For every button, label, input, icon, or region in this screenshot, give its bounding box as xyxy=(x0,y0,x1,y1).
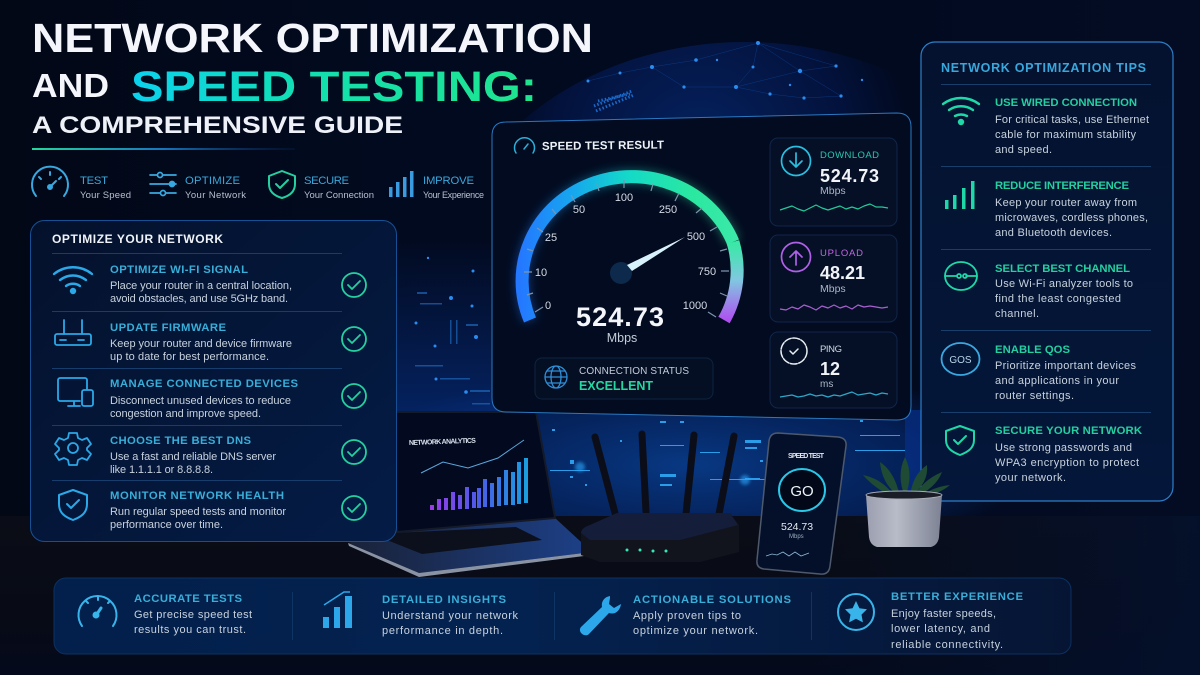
item: firmware xyxy=(55,320,366,363)
icon: gauge xyxy=(32,167,68,196)
icon: wrench xyxy=(580,596,621,635)
check xyxy=(342,496,366,520)
phone go text: GO xyxy=(790,483,814,500)
text: ACTIONABLE SOLUTIONS xyxy=(633,594,791,606)
text: wi-fi signal xyxy=(110,264,292,305)
text: Prioritize important devices xyxy=(995,360,1136,372)
ping figures: 12 xyxy=(820,359,840,379)
router antennas xyxy=(595,434,734,514)
gauge scale labels: 250 xyxy=(659,204,677,216)
bottom benefits strip xyxy=(54,578,1071,654)
phone heading: SPEED TEST xyxy=(788,453,825,460)
text: wi-fi signal: avoid obstacles, and use 5GHz band. xyxy=(110,293,288,305)
text xyxy=(134,593,252,636)
text: DETAILED INSIGHTS xyxy=(382,594,506,606)
panel heading xyxy=(514,138,664,153)
phone speed value: 524.73 xyxy=(781,521,813,533)
label: test: Your Speed xyxy=(80,190,131,201)
text: dns: like 1.1.1.1 or 8.8.8.8. xyxy=(110,464,213,476)
item: connected devices xyxy=(58,378,366,420)
text: and applications in your xyxy=(995,375,1119,387)
label: improve xyxy=(423,175,484,200)
text: network health: performance over time. xyxy=(110,519,223,531)
gauge scale labels: 0 xyxy=(545,300,551,312)
text: performance in depth. xyxy=(382,625,503,637)
text: and Bluetooth devices. xyxy=(995,227,1112,239)
subtitle: A COMPREHENSIVE GUIDE xyxy=(32,112,403,139)
label: secure: Your Connection xyxy=(304,190,374,201)
tip: qos xyxy=(942,343,1136,402)
text: dns: CHOOSE THE BEST DNS xyxy=(110,435,251,447)
label: optimize: OPTIMIZE xyxy=(185,175,240,187)
gauge scale labels: 1000 xyxy=(683,300,707,312)
panel: network optimization tips xyxy=(921,42,1173,501)
download figures: Mbps xyxy=(820,185,846,197)
ping figures: PING xyxy=(820,344,842,355)
panel: speed test result xyxy=(492,113,911,420)
router status lights xyxy=(626,548,668,552)
text: WPA3 encryption to protect xyxy=(995,457,1139,469)
gauge scale labels: 10 xyxy=(535,267,547,279)
icon: qos badge: GOS xyxy=(949,355,972,366)
label: test xyxy=(80,175,131,201)
laptop screen label: NETWORK ANALYTICS xyxy=(409,438,476,447)
icon: upload arrow xyxy=(782,242,810,272)
gauge arc xyxy=(522,177,733,320)
gauge scale labels: 750 xyxy=(698,266,716,278)
benefit: accurate tests xyxy=(78,593,252,636)
benefit: actionable solutions xyxy=(580,594,791,637)
icon: shield xyxy=(269,171,295,198)
tip: wired connection xyxy=(943,97,1149,156)
check xyxy=(342,384,366,408)
text xyxy=(995,344,1136,402)
text: SELECT BEST CHANNEL xyxy=(995,263,1130,275)
icon: globe xyxy=(545,366,567,388)
tip: best channel xyxy=(945,262,1133,320)
item: wi-fi signal xyxy=(54,264,366,305)
icon: signal bars xyxy=(389,171,414,197)
text xyxy=(995,263,1133,320)
text: network health: MONITOR NETWORK HEALTH xyxy=(110,490,284,502)
card: upload xyxy=(770,235,897,322)
text: reliable connectivity. xyxy=(891,639,1003,651)
text xyxy=(891,591,1023,651)
item: network health xyxy=(59,490,366,531)
title block xyxy=(32,15,593,150)
gauge xyxy=(522,177,737,345)
label: secure: SECURE xyxy=(304,175,349,187)
icon: router xyxy=(55,320,91,345)
text xyxy=(995,97,1149,156)
text: your network. xyxy=(995,472,1066,484)
label: test: TEST xyxy=(80,175,108,187)
icon: shield xyxy=(946,426,974,455)
gauge arc end xyxy=(724,242,737,320)
title highlight: SPEED TESTING: xyxy=(131,63,537,111)
gauge unit: Mbps xyxy=(607,331,637,345)
text: microwaves, cordless phones, xyxy=(995,212,1148,224)
icon: wifi xyxy=(943,98,979,124)
text: cable for maximum stability xyxy=(995,129,1136,141)
check xyxy=(342,273,366,297)
gauge scale labels xyxy=(535,192,716,312)
sparkline xyxy=(780,305,888,310)
text: router settings. xyxy=(995,390,1074,402)
text: firmware xyxy=(110,322,292,363)
background xyxy=(338,0,1200,675)
gauge scale labels: 50 xyxy=(573,204,585,216)
text: dns: Use a fast and reliable DNS server xyxy=(110,451,276,463)
icon: devices xyxy=(58,378,93,406)
label: improve: IMPROVE xyxy=(423,175,474,187)
text: Understand your network xyxy=(382,610,518,622)
feature row: test optimize secure improve xyxy=(32,167,484,201)
text: results you can trust. xyxy=(134,624,246,636)
upload figures: 48.21 xyxy=(820,263,865,283)
text: firmware: up to date for best performance. xyxy=(110,351,269,363)
icon: download arrow xyxy=(782,146,810,176)
tip: secure network xyxy=(946,425,1143,484)
sparkline xyxy=(780,204,888,211)
status label: CONNECTION STATUS xyxy=(579,366,689,377)
upload figures xyxy=(820,248,865,295)
icon: signal bars xyxy=(945,181,974,209)
text: Keep your router away from xyxy=(995,197,1137,209)
text: optimize your network. xyxy=(633,625,758,637)
label: optimize: Your Network xyxy=(185,190,246,201)
text xyxy=(995,425,1143,484)
connection status xyxy=(535,358,713,399)
text xyxy=(382,594,518,637)
heading text: SPEED TEST RESULT xyxy=(542,140,664,153)
laptop xyxy=(348,412,592,577)
benefit: detailed insights xyxy=(323,592,518,637)
text: Use Wi-Fi analyzer tools to xyxy=(995,278,1133,290)
title line one: NETWORK OPTIMIZATION xyxy=(32,15,593,61)
label: improve: Your Experience xyxy=(423,190,484,200)
text: and speed. xyxy=(995,144,1052,156)
text: REDUCE INTERFERENCE xyxy=(995,180,1129,192)
text: lower latency, and xyxy=(891,623,990,635)
text: firmware: Keep your router and device firmware xyxy=(110,338,292,350)
card: ping xyxy=(770,332,897,408)
title word: and: AND xyxy=(32,67,109,104)
ping figures: ms xyxy=(820,379,833,390)
check xyxy=(342,440,366,464)
icon: wifi xyxy=(54,267,92,293)
icon: gauge xyxy=(78,596,117,626)
download figures: DOWNLOAD xyxy=(820,150,879,161)
text: network health xyxy=(110,490,286,531)
phone go ring xyxy=(779,469,825,511)
router xyxy=(581,434,739,562)
icon: rising bars xyxy=(323,592,352,628)
text: dns xyxy=(110,435,276,476)
panel: optimize your network xyxy=(30,220,396,542)
text: find the least congested xyxy=(995,293,1121,305)
text: Enjoy faster speeds, xyxy=(891,608,996,620)
text: Apply proven tips to xyxy=(633,610,741,622)
text: firmware: UPDATE FIRMWARE xyxy=(110,322,226,334)
icon: qos badge xyxy=(942,343,980,375)
icon: ping dial xyxy=(781,338,807,364)
text: connected devices: Disconnect unused devices to reduce xyxy=(110,395,291,407)
label: secure xyxy=(304,175,374,201)
sparkline xyxy=(780,392,888,397)
card: download xyxy=(770,138,897,226)
icon: shield xyxy=(59,490,87,520)
text xyxy=(633,594,791,637)
panel heading: NETWORK OPTIMIZATION TIPS xyxy=(941,61,1146,75)
plant xyxy=(863,457,950,547)
status value: EXCELLENT xyxy=(579,379,653,393)
item: dns xyxy=(55,433,366,476)
text: connected devices xyxy=(110,378,298,420)
text: connected devices: MANAGE CONNECTED DEVICES xyxy=(110,378,298,390)
gauge scale labels: 25 xyxy=(545,232,557,244)
text: network health: Run regular speed tests and monitor xyxy=(110,506,286,518)
panel heading: OPTIMIZE YOUR NETWORK xyxy=(52,232,223,246)
upload figures: Mbps xyxy=(820,283,846,295)
text: ACCURATE TESTS xyxy=(134,593,242,605)
icon: gear xyxy=(55,433,91,465)
phone speed value xyxy=(781,521,813,540)
phone xyxy=(757,433,846,574)
text: Use strong passwords and xyxy=(995,442,1132,454)
text: For critical tasks, use Ethernet xyxy=(995,114,1149,126)
label: optimize xyxy=(185,175,246,201)
text: SECURE YOUR NETWORK xyxy=(995,425,1143,437)
tip: reduce interference xyxy=(945,180,1148,239)
benefit: better experience xyxy=(838,591,1023,651)
icon: gauge xyxy=(514,138,534,153)
icon: star badge xyxy=(838,594,874,630)
text: wi-fi signal: Place your router in a central location, xyxy=(110,280,292,292)
phone speed value: Mbps xyxy=(789,534,804,540)
upload figures: UPLOAD xyxy=(820,248,863,259)
icon: sliders xyxy=(150,172,176,196)
check xyxy=(342,327,366,351)
text: USE WIRED CONNECTION xyxy=(995,97,1137,109)
text xyxy=(995,180,1148,239)
text: wi-fi signal: OPTIMIZE WI-FI SIGNAL xyxy=(110,264,248,276)
gauge scale labels: 500 xyxy=(687,231,705,243)
phone sparkline xyxy=(766,552,809,556)
text: connected devices: congestion and improve speed. xyxy=(110,408,261,420)
ping figures xyxy=(820,344,842,390)
text: ENABLE QOS xyxy=(995,344,1070,356)
text: Get precise speed test xyxy=(134,609,252,621)
gauge scale labels: 100 xyxy=(615,192,633,204)
download figures xyxy=(820,150,879,197)
text: BETTER EXPERIENCE xyxy=(891,591,1023,603)
laptop bar chart xyxy=(430,458,528,510)
download figures: 524.73 xyxy=(820,166,879,186)
needle xyxy=(610,237,685,284)
text: channel. xyxy=(995,308,1039,320)
gauge value: 524.73 xyxy=(576,302,664,332)
icon: channel dial xyxy=(945,262,977,290)
